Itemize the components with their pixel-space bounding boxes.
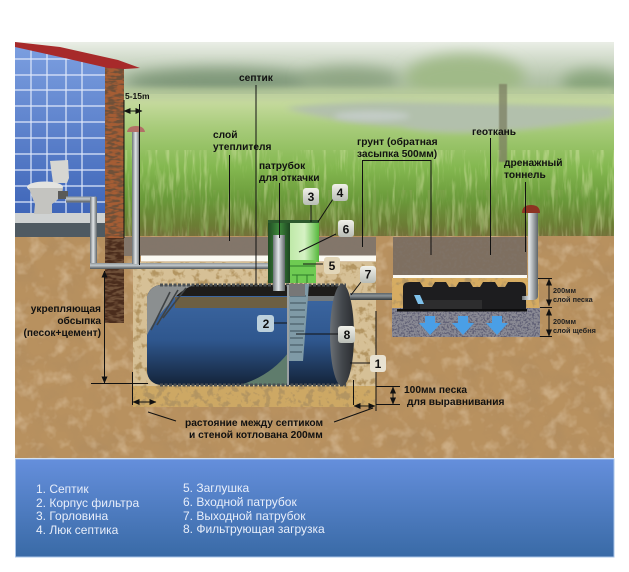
badge 1 bbox=[370, 355, 386, 372]
badge 6: 6 bbox=[343, 222, 350, 236]
badge 8: 8 bbox=[344, 328, 351, 342]
leader lines and dimensions bbox=[91, 85, 552, 422]
insulation layer: white strips bbox=[141, 256, 527, 278]
badge 6 bbox=[338, 220, 354, 237]
label: gravel layer: 200мм bbox=[553, 317, 576, 326]
legend column 2: 6. Входной патрубок bbox=[183, 495, 297, 509]
badge 4: 4 bbox=[337, 186, 344, 200]
badge 2: 2 bbox=[263, 317, 270, 331]
badge 7: 7 bbox=[365, 268, 372, 282]
label: sand layer: слой песка bbox=[553, 295, 594, 304]
label: reinforcing backfill: (песок+цемент) bbox=[23, 328, 101, 339]
badge 2 bbox=[257, 315, 274, 332]
label: reinforcing backfill: обсыпка bbox=[57, 315, 101, 327]
gravel layer bbox=[392, 308, 540, 337]
legend column 1: 3. Горловина bbox=[36, 509, 108, 523]
legend panel bbox=[16, 459, 614, 557]
legend column 2: 8. Фильтрующая загрузка bbox=[183, 522, 325, 536]
label: insulation layer: утеплителя bbox=[213, 142, 271, 153]
legend column 1: 2. Корпус фильтра bbox=[36, 496, 139, 510]
badge 8 bbox=[338, 326, 355, 343]
drainage sand layer bbox=[392, 278, 539, 309]
drainage tunnel bbox=[397, 282, 527, 312]
septic tank bbox=[147, 284, 354, 386]
underground soil bbox=[15, 236, 614, 458]
label: gravel layer: слой щебня bbox=[553, 326, 596, 335]
badge 7 bbox=[360, 266, 376, 283]
label: distance to pit wall: и стеной котлована 200мм bbox=[189, 430, 323, 441]
label: pump-out pipe: патрубок bbox=[259, 161, 305, 172]
drainage vent pipe with elbow bbox=[522, 205, 540, 300]
legend column 2: 7. Выходной патрубок bbox=[183, 509, 306, 523]
label: geotextile: геоткань bbox=[472, 127, 516, 138]
badge 3 bbox=[303, 188, 319, 205]
badge 4 bbox=[332, 184, 348, 201]
legend column 1: 1. Септик bbox=[36, 482, 89, 496]
topsoil layers bbox=[124, 237, 527, 276]
badge 3: 3 bbox=[308, 190, 315, 204]
background: tree bbox=[499, 84, 507, 162]
label: sand layer: 200мм bbox=[553, 286, 576, 295]
label: distance: 5-15m bbox=[125, 91, 150, 101]
background: misty forest bbox=[16, 42, 614, 94]
brick wall bbox=[105, 66, 124, 323]
infiltration arrows bbox=[419, 316, 508, 335]
label: backfill soil: грунт (обратная bbox=[357, 137, 438, 148]
toilet bbox=[27, 160, 69, 214]
label: levelling sand: 100мм песка bbox=[404, 385, 467, 396]
label: distance to pit wall: растояние между септиком bbox=[185, 418, 323, 429]
background: meadow bbox=[124, 86, 614, 236]
label: reinforcing backfill: укрепляющая bbox=[31, 304, 101, 315]
sewer pipe from house bbox=[66, 196, 280, 269]
badge 5 bbox=[324, 257, 340, 274]
house wall with tiles bbox=[15, 44, 107, 214]
label: insulation layer: слой bbox=[213, 130, 238, 141]
pump-out pipe bbox=[273, 235, 285, 291]
label: drainage tunnel: тоннель bbox=[504, 170, 546, 181]
green access shaft bbox=[268, 220, 319, 296]
badge 5: 5 bbox=[329, 259, 336, 273]
label: levelling sand: для выравнивания bbox=[407, 397, 504, 408]
roof bbox=[15, 42, 140, 69]
tank end cap bbox=[330, 284, 354, 386]
label: septic: септик bbox=[239, 73, 274, 84]
legend column 2: 5. Заглушка bbox=[183, 481, 249, 495]
vent pipe with cap bbox=[127, 126, 145, 264]
sand backfill around tank bbox=[133, 262, 376, 407]
filter body bbox=[289, 284, 309, 361]
outlet pipe bbox=[350, 293, 392, 300]
floor slab bbox=[15, 213, 105, 237]
background: pond bbox=[285, 102, 614, 133]
badge 1: 1 bbox=[375, 357, 382, 371]
label: pump-out pipe: для откачки bbox=[259, 173, 319, 184]
label: drainage tunnel: дренажный bbox=[504, 158, 563, 169]
label: backfill soil: засыпка 500мм) bbox=[357, 149, 437, 160]
illustration scene bbox=[15, 42, 622, 458]
legend column 1: 4. Люк септика bbox=[36, 523, 119, 537]
